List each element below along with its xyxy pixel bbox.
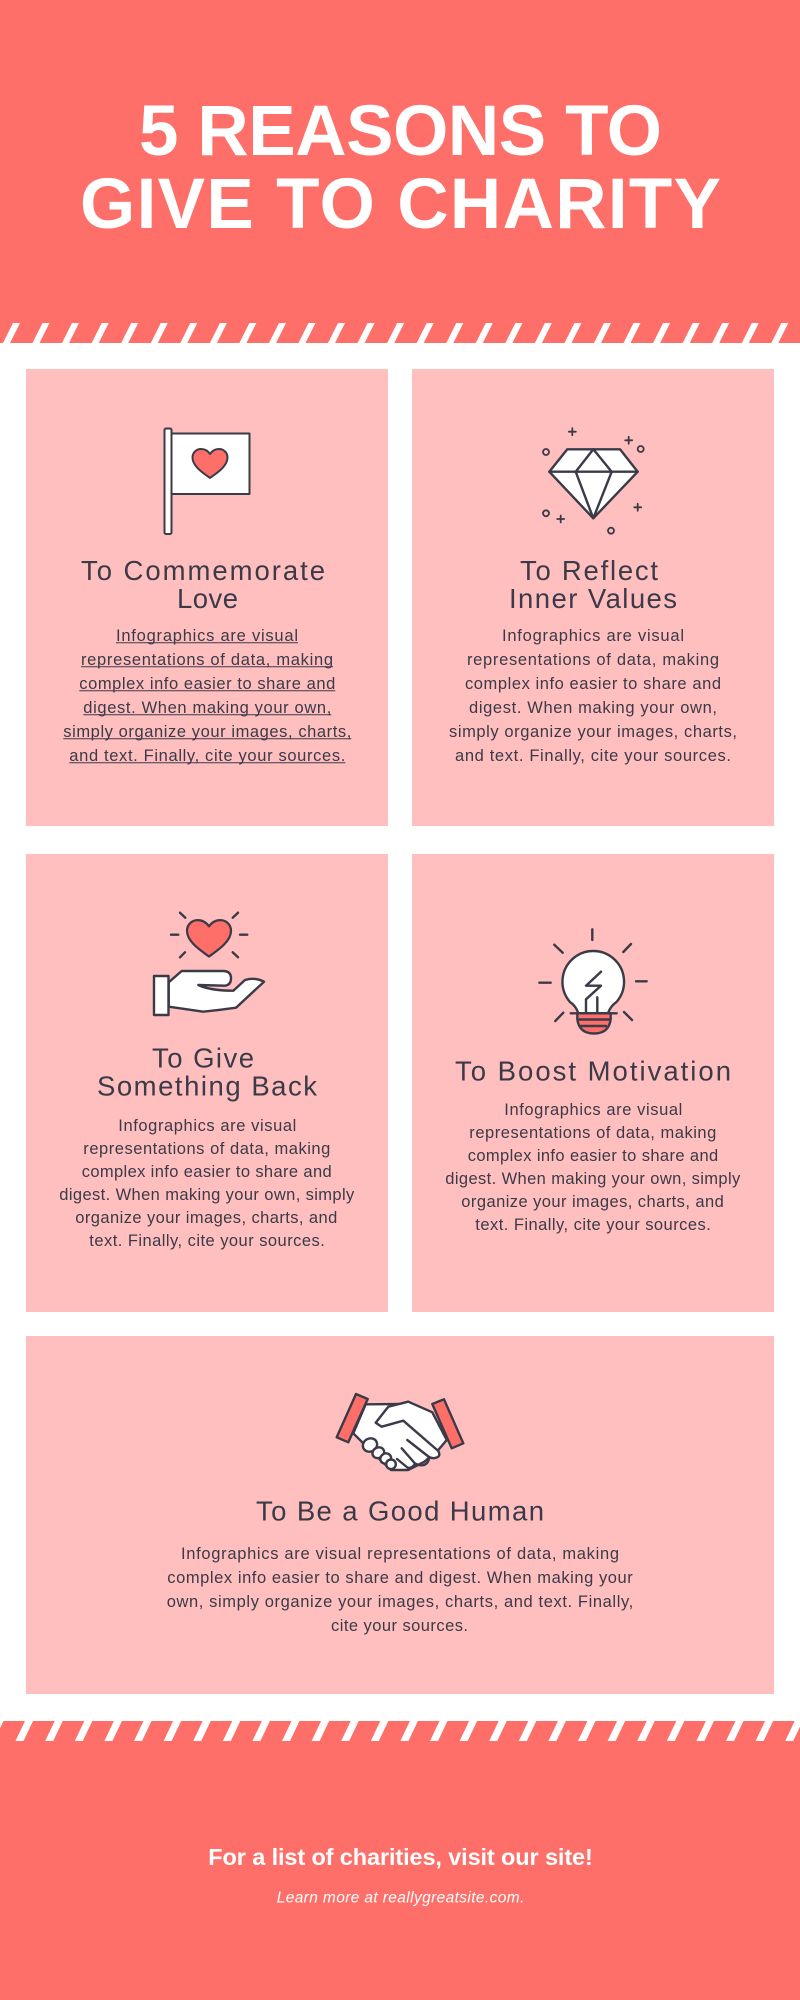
- heading: to commemorate love: Love: [177, 583, 238, 614]
- heading: to reflect inner values: To Reflect: [520, 555, 658, 586]
- text: underlined description: and text. Finally, cite your sources.: [69, 747, 345, 765]
- title: GIVE TO CHARITY: [80, 165, 721, 244]
- text: description: representations of data, making: [467, 651, 719, 669]
- text: description: text. Finally, cite your sources.: [89, 1232, 325, 1250]
- text: description: [445, 1101, 741, 1234]
- text: underlined description: complex info easier to share and: [79, 675, 335, 693]
- text: description: organize your images, charts, and: [461, 1193, 724, 1211]
- text: description: cite your sources.: [331, 1617, 468, 1635]
- heading: to reflect inner values: Inner Values: [509, 583, 677, 614]
- panel: footer banner: [0, 1721, 800, 2000]
- text: description: and text. Finally, cite your sources.: [455, 747, 731, 765]
- text: underlined description: representations of data, making: [81, 651, 333, 669]
- heading: to boost motivation: To Boost Motivation: [455, 1056, 731, 1087]
- panel: header banner: [0, 0, 800, 343]
- panel: to boost motivation: [412, 854, 774, 1312]
- text: description: digest. When making your own, simply: [59, 1186, 355, 1204]
- text: underlined description: Infographics are visual: [116, 627, 298, 645]
- text: description: digest. When making your own, simply: [445, 1170, 741, 1188]
- text: description: [167, 1545, 633, 1635]
- heading: to be a good human: To Be a Good Human: [256, 1496, 544, 1527]
- heading: to give something back: Something Back: [97, 1071, 317, 1102]
- text: description: complex info easier to share and: [82, 1163, 332, 1181]
- text: description: [449, 627, 737, 765]
- text: description: own, simply organize your images, charts, and text. Finally,: [167, 1593, 633, 1611]
- panel: to be a good human: [26, 1336, 774, 1694]
- text: description: representations of data, making: [469, 1124, 716, 1142]
- text: description: complex info easier to share and: [468, 1147, 718, 1165]
- text: description: complex info easier to share and: [465, 675, 721, 693]
- text: description: [59, 1117, 355, 1250]
- text: description: organize your images, charts, and: [75, 1209, 337, 1227]
- icon: diamond with sparkles: [543, 428, 644, 534]
- icon: hand holding heart: [154, 913, 264, 1015]
- heading: to commemorate love: To Commemorate: [81, 555, 325, 586]
- text: description: simply organize your images, charts,: [449, 723, 737, 741]
- text: description: text. Finally, cite your sources.: [475, 1216, 711, 1234]
- call to action: For a list of charities, visit our site!: [208, 1844, 593, 1870]
- panel: to reflect inner values: [412, 369, 774, 826]
- panel: to commemorate love: [26, 369, 388, 826]
- heading: to give something back: [97, 1043, 317, 1102]
- text: description: Infographics are visual representations of data, making: [181, 1545, 619, 1563]
- heading: to reflect inner values: [509, 555, 677, 614]
- text: underlined description: [63, 627, 351, 765]
- icon: flag with heart: [164, 428, 250, 534]
- heading: to give something back: To Give: [152, 1043, 254, 1074]
- title: 5 REASONS TO: [139, 92, 662, 171]
- text: description: Infographics are visual: [118, 1117, 296, 1135]
- website note: Learn more at reallygreatsite.com.: [277, 1889, 524, 1906]
- panel: to give something back: [26, 854, 388, 1312]
- title: [80, 92, 721, 244]
- text: description: representations of data, making: [83, 1140, 330, 1158]
- heading: to commemorate love: [81, 555, 325, 614]
- icon: handshake: [337, 1394, 463, 1470]
- text: description: digest. When making your own,: [469, 699, 717, 717]
- icon: light bulb: [539, 929, 647, 1034]
- text: description: complex info easier to share and digest. When making your: [167, 1569, 633, 1587]
- text: underlined description: digest. When making your own,: [83, 699, 331, 717]
- text: description: Infographics are visual: [504, 1101, 682, 1119]
- text: underlined description: simply organize your images, charts,: [63, 723, 351, 741]
- text: description: Infographics are visual: [502, 627, 684, 645]
